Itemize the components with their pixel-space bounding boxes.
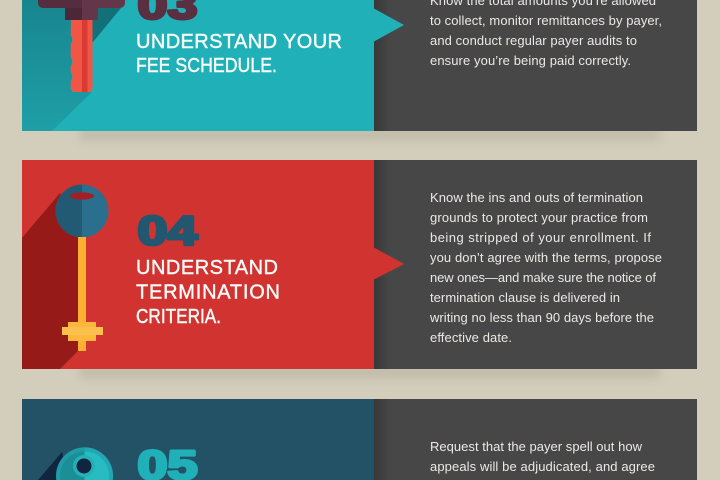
heading 03: UNDERSTAND YOUR bbox=[136, 31, 342, 53]
body text 04: Know the ins and outs of termination bbox=[430, 190, 643, 205]
body text 03: to collect, monitor remittances by payer, bbox=[430, 13, 662, 28]
red title panel bbox=[22, 160, 374, 369]
body text 04: termination clause is delivered in bbox=[430, 290, 620, 305]
panel: step 05 description bbox=[374, 399, 697, 480]
panel: step 04 termination criteria bbox=[22, 160, 374, 369]
icon: key 03 bbox=[38, 0, 125, 92]
heading 04: UNDERSTAND bbox=[136, 257, 278, 279]
heading 04 bbox=[136, 257, 280, 328]
heading 03 bbox=[136, 31, 342, 77]
body text 04: writing no less than 90 days before the bbox=[429, 310, 654, 325]
heading 04: CRITERIA. bbox=[136, 306, 221, 328]
panel shadows bbox=[80, 128, 660, 378]
panel: step 05 appeals bbox=[22, 399, 374, 480]
body text 03: and conduct regular payer audits to bbox=[430, 33, 637, 48]
arrow 04 bbox=[373, 247, 404, 280]
heading 03: FEE SCHEDULE. bbox=[136, 55, 277, 77]
teal title panel bbox=[22, 0, 374, 131]
panel: step 03 description bbox=[373, 0, 697, 131]
key shadow bbox=[22, 193, 78, 369]
body text 05: appeals will be adjudicated, and agree bbox=[430, 459, 655, 474]
key shadow bbox=[22, 0, 121, 131]
body text 03: ensure you’re being paid correctly. bbox=[430, 53, 631, 68]
body text 05: Request that the payer spell out how bbox=[430, 439, 643, 454]
number 04: 04 bbox=[138, 208, 198, 254]
body text 05 bbox=[430, 439, 655, 474]
body text 04: being stripped of your enrollment. If bbox=[430, 230, 651, 245]
panel: step 04 description bbox=[373, 160, 697, 369]
body text 04: new ones—and make sure the notice of bbox=[430, 270, 656, 285]
panel: step 03 fee schedule bbox=[22, 0, 374, 131]
body text 04: effective date. bbox=[430, 330, 512, 345]
navy title panel bbox=[22, 399, 374, 480]
icon: key 04 bbox=[56, 184, 108, 351]
body text 03 bbox=[430, 0, 662, 68]
key shadow bbox=[38, 452, 68, 480]
icon: key 05 bbox=[56, 447, 113, 480]
arrow 03 bbox=[373, 8, 404, 42]
heading 04: TERMINATION bbox=[136, 282, 280, 304]
body text 04: you don’t agree with the terms, propose bbox=[430, 250, 662, 265]
body text 04: grounds to protect your practice from bbox=[430, 210, 648, 225]
body text 04 bbox=[429, 190, 662, 345]
